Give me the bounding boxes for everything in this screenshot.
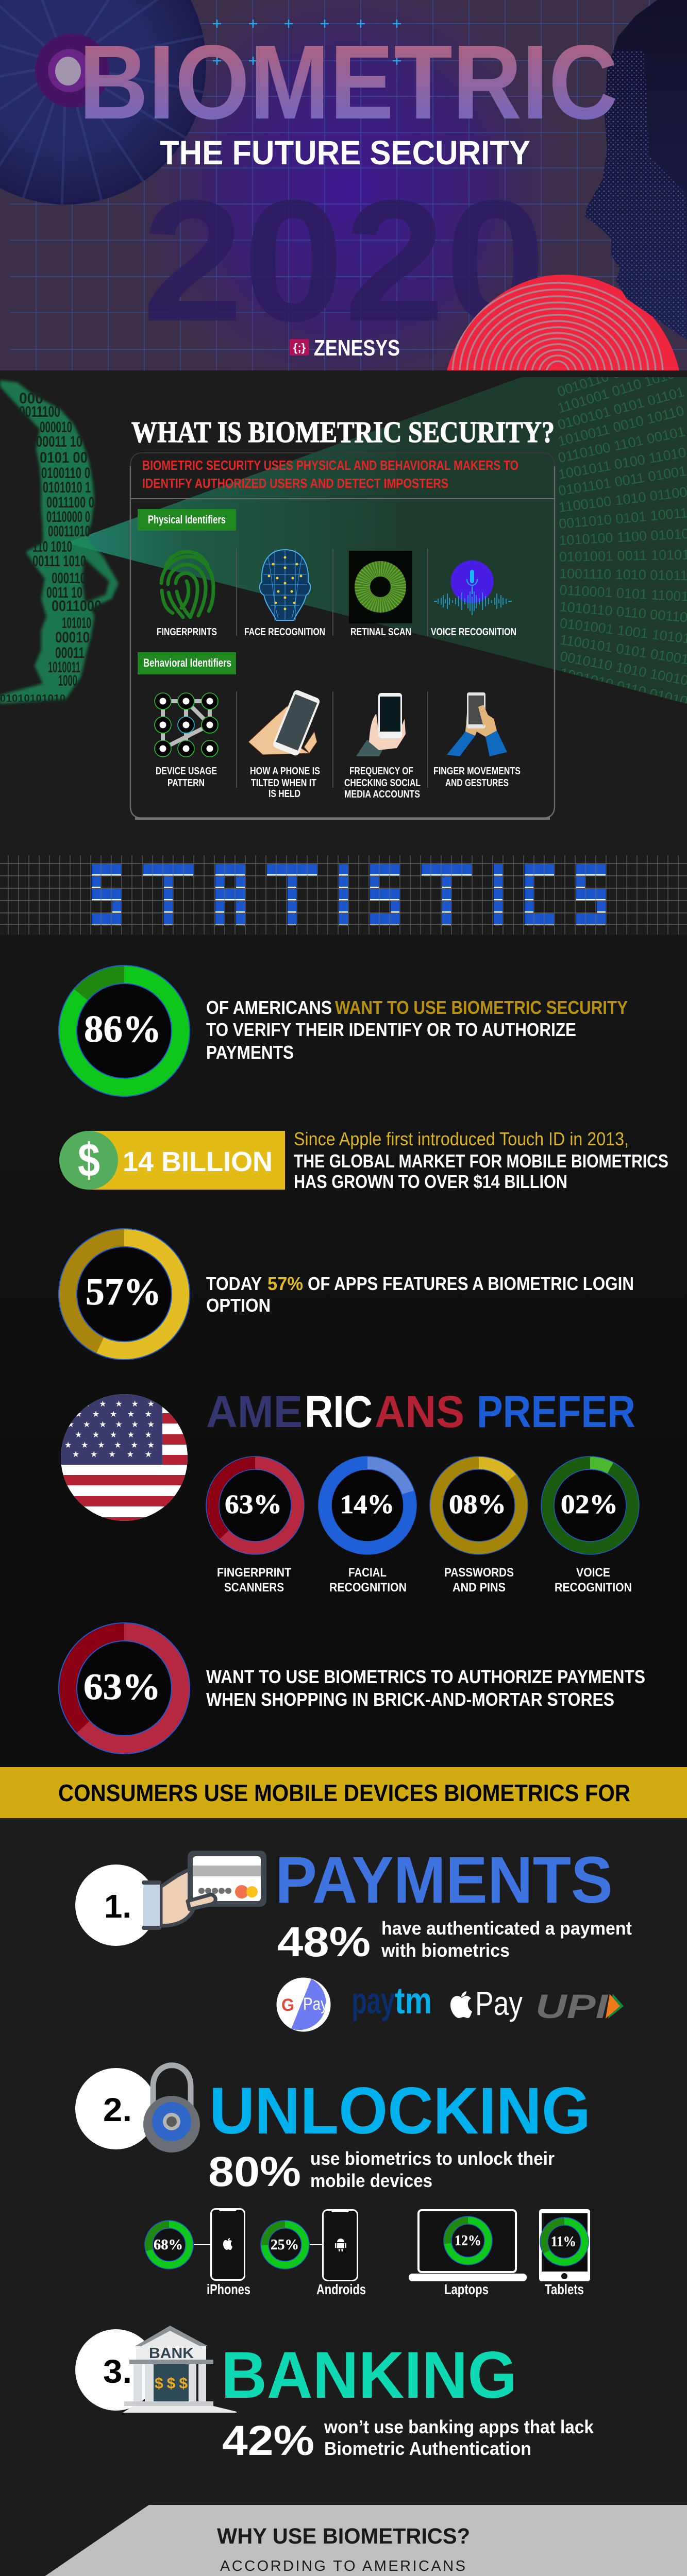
stat text: 86%: WANT TO USE BIOMETRIC SECURITY	[335, 997, 628, 1018]
device chart: tablets: 11%	[551, 2234, 576, 2250]
heading: statistics pixel board	[0, 855, 687, 938]
binary wall: 0110100 1101 00101	[557, 423, 686, 466]
logo: zenesys: ZENESYS	[314, 335, 400, 361]
stat text: 57%: OF APPS FEATURES A BIOMETRIC LOGIN	[308, 1273, 634, 1294]
binary face profile: 101010	[62, 615, 91, 632]
behavioral identifier labels: HOW A PHONE IS	[250, 766, 320, 777]
definition text	[142, 457, 518, 491]
heading: americans prefer: AME	[206, 1387, 303, 1437]
logo: zenesys: {;}	[293, 341, 306, 354]
icon: hand tilting phone	[248, 689, 321, 757]
stat: 48%	[277, 1918, 632, 1965]
binary face profile: 0110000 0	[46, 509, 90, 526]
device chart: androids: 25%	[271, 2237, 299, 2253]
donut chart: 57%	[59, 1229, 190, 1360]
physical identifier labels: VOICE RECOGNITION	[431, 626, 516, 638]
binary face profile: 0011100 0	[46, 494, 94, 511]
stat: 80%: 80%	[208, 2148, 301, 2195]
stat text: 57%: TODAY	[206, 1273, 262, 1294]
heading: americans prefer: RIC	[305, 1387, 373, 1437]
binary face profile: 00011	[55, 645, 85, 662]
number badge 1: 1.	[104, 1888, 131, 1925]
device chart: tablets: Tablets	[545, 2281, 584, 2297]
rounded frame	[130, 453, 555, 819]
stat: 42%: Biometric Authentication	[324, 2438, 531, 2459]
A	[215, 864, 245, 925]
subheading: according to americans: ACCORDING TO AMERICANS	[220, 2558, 465, 2574]
binary wall: 1101001 0110 10100	[556, 364, 684, 416]
binary face profile: 01010101010	[0, 693, 65, 704]
title: BIOMETRIC: BIOMETRIC	[79, 23, 618, 141]
stat text: 86%: OF AMERICANS	[206, 997, 332, 1018]
donut chart: passwords and pins: 08%	[449, 1490, 506, 1519]
icon: hand with credit card	[142, 1851, 266, 1930]
behavioral identifier labels: CHECKING SOCIAL	[344, 777, 421, 789]
icon: finger gestures on phone	[447, 692, 507, 756]
stats section background	[0, 935, 687, 1767]
stat: 48%: have authenticated a payment	[381, 1918, 632, 1939]
icon: american flag	[61, 1394, 188, 1521]
icon: voice recognition	[434, 561, 512, 615]
background year 2020: 2020	[142, 164, 546, 358]
I	[494, 864, 502, 925]
behavioral identifier labels	[156, 766, 521, 800]
badge: 14 billion: 14 BILLION	[123, 1146, 273, 1177]
badge: 14 billion: $	[78, 1134, 100, 1187]
icon: iris eye	[0, 0, 206, 211]
subtitle: the future security: THE FUTURE SECURITY	[160, 133, 530, 172]
logo: apple pay	[450, 1984, 523, 2022]
icon: combination lock	[143, 2065, 200, 2153]
logo: apple pay: Pay	[475, 1984, 523, 2022]
label: physical identifiers: Physical Identifiers	[148, 513, 226, 526]
device chart: iphones	[145, 2208, 250, 2297]
donut chart: voice recognition: 02%	[561, 1490, 618, 1519]
stat text: 63% payments	[206, 1666, 645, 1710]
behavioral identifier labels: TILTED WHEN IT	[251, 777, 316, 789]
binary face profile: 00010	[55, 629, 90, 646]
T	[143, 864, 193, 925]
heading: why use biometrics: WHY USE BIOMETRICS?	[217, 2524, 470, 2549]
device chart: iphones: iPhones	[207, 2281, 250, 2297]
number badge 1	[75, 1865, 157, 1946]
icon: american flag: ★ ★ ★ ★ ★	[75, 1431, 152, 1439]
behavioral identifier labels: PATTERN	[167, 777, 205, 789]
donut labels: SCANNERS	[224, 1581, 284, 1595]
number badge 2: 2.	[103, 2091, 132, 2128]
label: physical identifiers	[138, 509, 236, 531]
icon: bank building	[123, 2326, 237, 2413]
binary wall: 0101001 0011 10101	[559, 547, 687, 565]
heading: statistics pixel board: STATISTICS	[91, 869, 606, 938]
heading: americans prefer	[206, 1387, 635, 1437]
icon: american flag: ★ ★ ★ ★ ★	[75, 1410, 152, 1419]
binary wall: 0100101 0101 01101	[556, 384, 686, 433]
behavioral identifier labels: IS HELD	[269, 788, 300, 800]
behavioral identifier labels: FINGER MOVEMENTS	[433, 766, 521, 777]
icon: face recognition	[260, 550, 310, 620]
I	[339, 864, 348, 925]
stat text: 14 billion: HAS GROWN TO OVER $14 BILLION	[294, 1171, 567, 1192]
panel: what is biometric security	[0, 345, 687, 819]
logo: upi: UPI	[535, 1987, 609, 2025]
banner: consumers use mobile devices biometrics for	[0, 1767, 687, 1818]
binary face profile: 000	[19, 390, 43, 407]
device chart: tablets	[539, 2209, 590, 2297]
binary wall: 0010110 1010 10010	[559, 648, 687, 688]
binary wall: 0101101 0011 01001	[557, 463, 687, 499]
donut labels: RECOGNITION	[555, 1581, 632, 1595]
header panel	[0, 0, 687, 370]
donut chart: 63% payments: 63%	[83, 1666, 161, 1707]
binary face profile: 0011000	[52, 598, 102, 615]
binary wall: 1100100 1010 01100	[558, 484, 687, 515]
physical identifier labels: RETINAL SCAN	[350, 626, 411, 638]
icon: hand holding phone	[356, 693, 406, 756]
stat text: 57%	[206, 1273, 634, 1316]
binary face profile: 00011010	[48, 523, 90, 540]
donut labels: RECOGNITION	[329, 1581, 407, 1595]
device chart: laptops: 12%	[455, 2233, 481, 2249]
beam of light	[66, 377, 687, 704]
binary face profile: 00111 1010	[32, 553, 86, 570]
label: behavioral identifiers: Behavioral Identifiers	[143, 656, 231, 669]
binary wall: 1001011 0100 11010	[557, 445, 687, 482]
stat text: 57%: OPTION	[206, 1295, 271, 1316]
heading: unlocking: UNLOCKING	[209, 2074, 591, 2148]
binary wall: 1001010 0110 01010	[559, 665, 687, 709]
donut labels: VOICE	[576, 1566, 610, 1580]
T	[267, 864, 317, 925]
logo: google pay: Pay	[303, 1994, 328, 2014]
binary face profile: 110 1010	[32, 538, 72, 555]
heading: americans prefer: PREFER	[477, 1387, 635, 1437]
device chart: laptops	[409, 2210, 527, 2297]
donut labels: AND PINS	[453, 1581, 506, 1595]
binary face profile: 0011 10	[46, 584, 82, 601]
binary face profile	[0, 380, 119, 704]
label: behavioral identifiers	[138, 652, 236, 674]
panel: why use biometrics	[0, 2505, 687, 2576]
donut chart: 57%: 57%	[86, 1271, 161, 1313]
T	[422, 864, 472, 925]
icon: fingerprint	[161, 552, 213, 617]
icon: american flag: ★ ★ ★ ★ ★ ★	[67, 1400, 155, 1409]
donut chart: fingerprint scanners	[206, 1456, 304, 1554]
binary wall: 1001110 1010 01011	[559, 566, 687, 583]
number badge 3: 3.	[103, 2353, 132, 2390]
device chart: androids: Androids	[316, 2281, 366, 2297]
heading: americans prefer: ANS	[375, 1387, 464, 1437]
stat text: 14 billion	[294, 1128, 668, 1192]
binary wall	[558, 377, 687, 704]
donut chart: 86%: 86%	[84, 1008, 161, 1050]
stat text: 57%: 57%	[267, 1273, 303, 1294]
binary wall: 1010100 1100 01010	[559, 526, 687, 548]
stat: 42%	[222, 2416, 594, 2464]
S	[370, 864, 399, 925]
icon: bank building: $$$	[155, 2375, 188, 2392]
behavioral identifier labels: DEVICE USAGE	[156, 766, 217, 777]
binary face profile: 1010011	[48, 659, 80, 676]
binary wall: 0010110 010 010101	[556, 345, 684, 400]
binary wall: 0110001 0101 11001	[559, 582, 687, 604]
heading: banking: BANKING	[221, 2338, 517, 2412]
binary face profile: 0100110 0	[41, 465, 90, 482]
icon: red fingerprint	[447, 275, 679, 370]
number badge 2	[75, 2068, 157, 2149]
logo: google pay: G	[281, 1995, 294, 2015]
banner: consumers use mobile devices biometrics for: CONSUMERS USE MOBILE DEVICES BIOMETRICS FOR	[58, 1780, 630, 1806]
S	[576, 864, 606, 925]
binary face profile: 000010	[40, 419, 72, 436]
binary face profile: 0101 00	[40, 449, 88, 466]
binary wall: 1010011 0010 10110	[556, 403, 685, 449]
icon: american flag: ★ ★ ★ ★ ★ ★	[67, 1420, 155, 1429]
stat text: 14 billion: Since Apple first introduced Touch ID in 2013,	[294, 1128, 629, 1149]
stat text: 63% payments: WHEN SHOPPING IN BRICK-AND-MORTAR STORES	[206, 1689, 614, 1710]
binary face profile: 0011100	[19, 403, 60, 420]
binary wall: 1100101 0101 01001	[559, 632, 687, 668]
icon: bank building: BANK	[149, 2345, 194, 2362]
icon: retinal scan	[349, 551, 412, 623]
stat text: 86%: PAYMENTS	[206, 1042, 294, 1063]
icon: american flag: ★ ★ ★ ★ ★ ★	[64, 1441, 155, 1450]
definition text: BIOMETRIC SECURITY USES PHYSICAL AND BEHAVIORAL MAKERS TO	[142, 457, 518, 473]
binary wall: 0011010 0101 10011	[558, 505, 687, 532]
donut chart: 86%	[59, 965, 190, 1096]
stat: 42%: 42%	[222, 2417, 314, 2464]
logo: paytm: tm	[395, 1980, 432, 2022]
donut chart: 63% payments	[59, 1623, 190, 1754]
binary wall: 1010110 0110 00110	[559, 599, 687, 625]
stat: 80%: use biometrics to unlock their	[310, 2148, 555, 2169]
donut chart: passwords and pins	[430, 1456, 528, 1554]
stat: 80%: mobile devices	[310, 2170, 432, 2191]
stat text: 86%: TO VERIFY THEIR IDENTIFY OR TO AUTHORIZE	[206, 1019, 576, 1040]
physical identifier labels: FACE RECOGNITION	[244, 626, 325, 638]
S	[92, 864, 121, 925]
donut chart: facial recognition: 14%	[340, 1490, 394, 1519]
stat: 48%: with biometrics	[381, 1940, 510, 1961]
binary face profile: 1000	[58, 672, 77, 689]
icon: device usage pattern	[155, 693, 218, 757]
stat: 42%: won’t use banking apps that lack	[324, 2416, 594, 2437]
physical identifier labels: FINGERPRINTS	[157, 626, 217, 638]
physical identifier labels	[157, 626, 516, 638]
donut chart: facial recognition	[319, 1456, 416, 1554]
icon: american flag: ★ ★ ★ ★ ★	[72, 1450, 152, 1459]
binary face profile: 0101010 1	[43, 479, 91, 496]
donut chart: fingerprint scanners: 63%	[225, 1490, 282, 1519]
donut labels: FACIAL	[348, 1566, 387, 1580]
device chart: androids	[261, 2209, 366, 2297]
heading: payments: PAYMENTS	[275, 1843, 613, 1917]
donut labels: FINGERPRINT	[217, 1566, 291, 1580]
donut labels: PASSWORDS	[444, 1566, 514, 1580]
stat text: 86%	[206, 997, 628, 1063]
silhouette head with dots	[585, 0, 687, 340]
stat: 48%: 48%	[277, 1919, 371, 1965]
behavioral identifier labels: AND GESTURES	[445, 777, 509, 789]
donut chart: voice recognition	[541, 1456, 639, 1554]
stat: 80%	[208, 2148, 555, 2195]
logo: zenesys	[290, 335, 400, 361]
binary face profile: 00011 10	[36, 433, 82, 450]
number badge 3	[75, 2329, 157, 2411]
donut labels	[217, 1566, 632, 1595]
device chart: iphones: 68%	[154, 2237, 183, 2253]
device chart: laptops: Laptops	[444, 2281, 489, 2297]
C	[525, 864, 554, 925]
binary face profile: 000110	[52, 570, 86, 587]
logo: upi	[535, 1987, 624, 2025]
logo: paytm: pay	[351, 1980, 395, 2022]
behavioral identifier labels: FREQUENCY OF	[349, 766, 413, 777]
behavioral identifier labels: MEDIA ACCOUNTS	[344, 789, 420, 800]
heading: what is biometric security: WHAT IS BIOMETRIC SECURITY?	[131, 415, 555, 449]
badge: 14 billion	[59, 1131, 285, 1190]
logo: google pay	[276, 1977, 331, 2032]
definition text: IDENTIFY AUTHORIZED USERS AND DETECT IMPOSTERS	[142, 476, 448, 491]
